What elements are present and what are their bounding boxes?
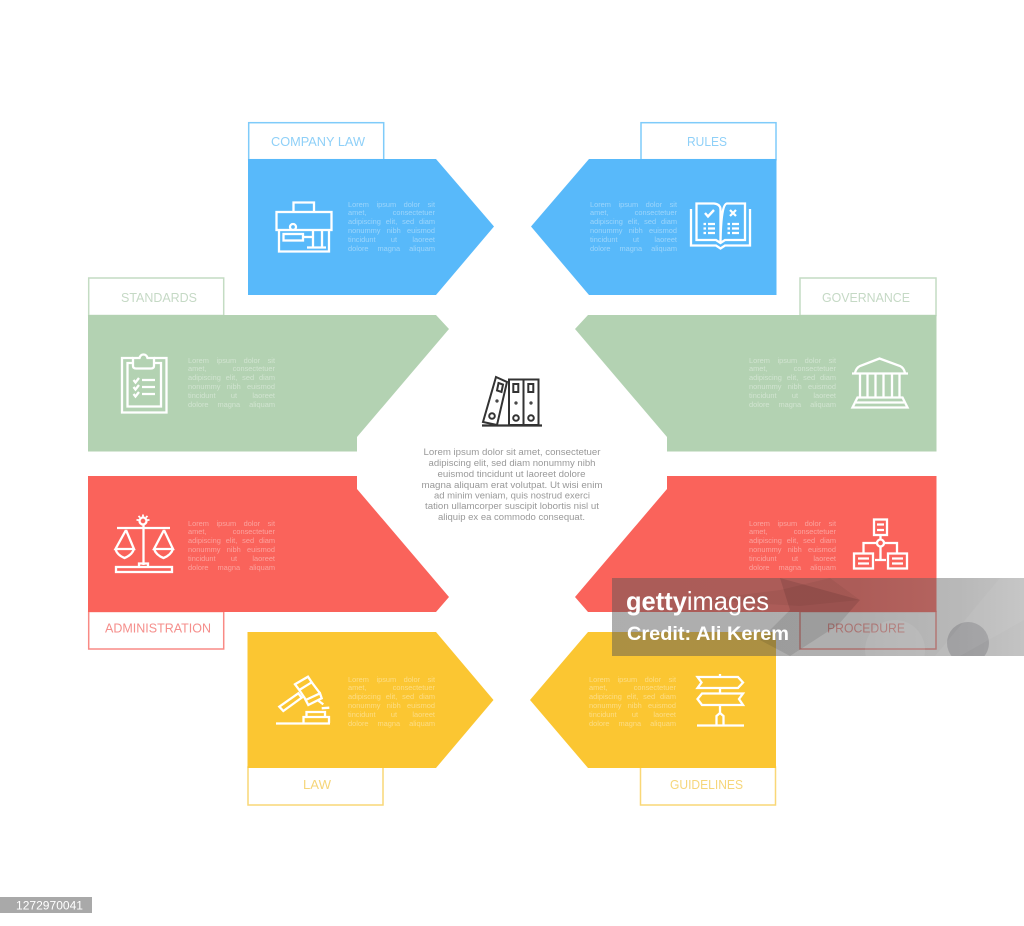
text block: procedure: nonummy nibh euismod [749,545,836,554]
text block: procedure: tincidunt ut laoreet [749,554,836,563]
text block: administration: amet, consectetuer [188,527,275,536]
text block: law [348,675,435,728]
tab: guidelines [640,767,776,805]
text block: procedure: dolore magna aliquam [749,563,836,572]
text block: standards: tincidunt ut laoreet [188,391,275,400]
text block: governance: dolore magna aliquam [749,400,836,409]
icon: binders on a shelf [482,377,542,426]
text block: company law: tincidunt ut laoreet [348,235,435,244]
panel: company law [248,122,494,295]
text block: centre description [422,447,602,522]
watermark: getty images credit [612,578,1024,656]
text block: administration: adipiscing elit, sed diam [188,536,275,545]
text block: guidelines: nonummy nibh euismod [589,701,676,710]
arrow shape: rules [531,159,776,295]
text block: rules: nonummy nibh euismod [590,226,677,235]
icon: classical building [852,358,908,408]
arrow shape: company law [248,159,494,295]
text block: rules: adipiscing elit, sed diam [590,217,677,226]
arrow shape: standards [88,315,449,452]
arrow shape: governance [575,315,936,452]
text block: guidelines: adipiscing elit, sed diam [589,692,676,701]
text block: company law: nonummy nibh euismod [348,226,435,235]
text block: guidelines [589,675,676,728]
arrow shape: law [248,632,494,768]
text block: standards: nonummy nibh euismod [188,382,275,391]
tab: company law: COMPANY LAW [271,134,366,149]
tab: procedure [800,612,936,649]
text block: rules: amet, consectetuer [590,208,677,217]
text block: procedure: adipiscing elit, sed diam [749,536,836,545]
text block: governance: Lorem ipsum dolor sit [749,356,836,365]
text block: standards [188,356,275,409]
text block: company law: adipiscing elit, sed diam [348,217,435,226]
text block: governance: amet, consectetuer [749,364,836,373]
icon: briefcase [276,202,332,252]
text block: company law [348,200,435,253]
panel: administration [88,476,449,650]
text block: procedure [749,519,836,572]
tab: governance [800,278,936,316]
tab: administration: ADMINISTRATION [105,620,211,636]
icon: open book [691,204,750,248]
icon: scales of justice with gear [116,514,173,572]
text block: law: tincidunt ut laoreet [348,710,435,719]
watermark: getty images credit: gettyimages [626,586,769,616]
icon: clipboard checklist [122,354,166,412]
text block: law: Lorem ipsum dolor sit [348,675,435,684]
panel: guidelines [530,632,776,806]
text block: rules [590,200,677,253]
arrow shape: guidelines [530,632,776,768]
text block: standards: amet, consectetuer [188,364,275,373]
arrow shape: procedure [575,476,936,612]
text block: procedure: amet, consectetuer [749,527,836,536]
text block: centre description: aliquip ex ea commodo consequat. [438,512,585,522]
text block: law: amet, consectetuer [348,683,435,692]
text block: guidelines: tincidunt ut laoreet [589,710,676,719]
text block: rules: Lorem ipsum dolor sit [590,200,677,209]
text block: rules: tincidunt ut laoreet [590,235,677,244]
text block: administration: dolore magna aliquam [188,563,275,572]
text block: centre description: magna aliquam erat volutpat. Ut wisi enim [422,480,602,490]
text block: administration: Lorem ipsum dolor sit [188,519,275,528]
panel: standards [88,277,449,452]
text block: centre description: adipiscing elit, sed diam nonummy nibh [428,458,596,468]
tab: law: LAW [303,777,332,792]
text block: company law: amet, consectetuer [348,208,435,217]
panel: governance [575,277,937,452]
text block: centre description: euismod tincidunt ut laoreet dolore [438,469,586,479]
text block: administration: nonummy nibh euismod [188,545,275,554]
text block: standards: dolore magna aliquam [188,400,275,409]
tab: administration [89,612,224,649]
text block: centre description: ad minim veniam, quis nostrud exerci [434,490,590,500]
panel: centre [422,376,602,522]
tab: company law [249,123,384,160]
text block: governance: nonummy nibh euismod [749,382,836,391]
text block: guidelines: Lorem ipsum dolor sit [589,675,676,684]
text block: governance: adipiscing elit, sed diam [749,373,836,382]
text block: law: dolore magna aliquam [348,719,435,728]
arrow shape: administration [88,476,449,612]
text block: administration: tincidunt ut laoreet [188,554,275,563]
tab: governance: GOVERNANCE [822,290,910,305]
tab: guidelines: GUIDELINES [670,777,743,792]
text block: governance: tincidunt ut laoreet [749,391,836,400]
tab: law [248,767,383,805]
text block: governance [749,356,836,409]
text block: rules: dolore magna aliquam [590,244,677,253]
text block: centre description: tation ullamcorper suscipit lobortis nisl ut [425,501,600,511]
text block: procedure: Lorem ipsum dolor sit [749,519,836,528]
icon: gavel [276,677,330,724]
tab: standards: STANDARDS [121,290,197,305]
text block: law: nonummy nibh euismod [348,701,435,710]
text block: standards: Lorem ipsum dolor sit [188,356,275,365]
text block: centre description: Lorem ipsum dolor sit amet, consectetuer [424,447,600,457]
text block: administration [188,519,275,572]
text block: guidelines: dolore magna aliquam [589,719,676,728]
tab: standards [89,278,224,316]
icon: signpost [697,674,744,726]
text block: company law: Lorem ipsum dolor sit [348,200,435,209]
text block: guidelines: amet, consectetuer [589,683,676,692]
panel: law [247,632,494,806]
panel: procedure [575,476,937,650]
image id tag: 1272970041 [16,898,83,912]
watermark: getty images credit: Credit: Ali Kerem [627,623,789,645]
text block: company law: dolore magna aliquam [348,244,435,253]
tab: procedure: PROCEDURE [827,620,905,636]
icon: organisation flow chart [854,520,907,568]
tab: rules: RULES [687,134,727,149]
image id tag [0,897,92,913]
text block: law: adipiscing elit, sed diam [348,692,435,701]
text block: standards: adipiscing elit, sed diam [188,373,275,382]
tab: rules [641,123,776,160]
panel: rules [531,122,777,295]
